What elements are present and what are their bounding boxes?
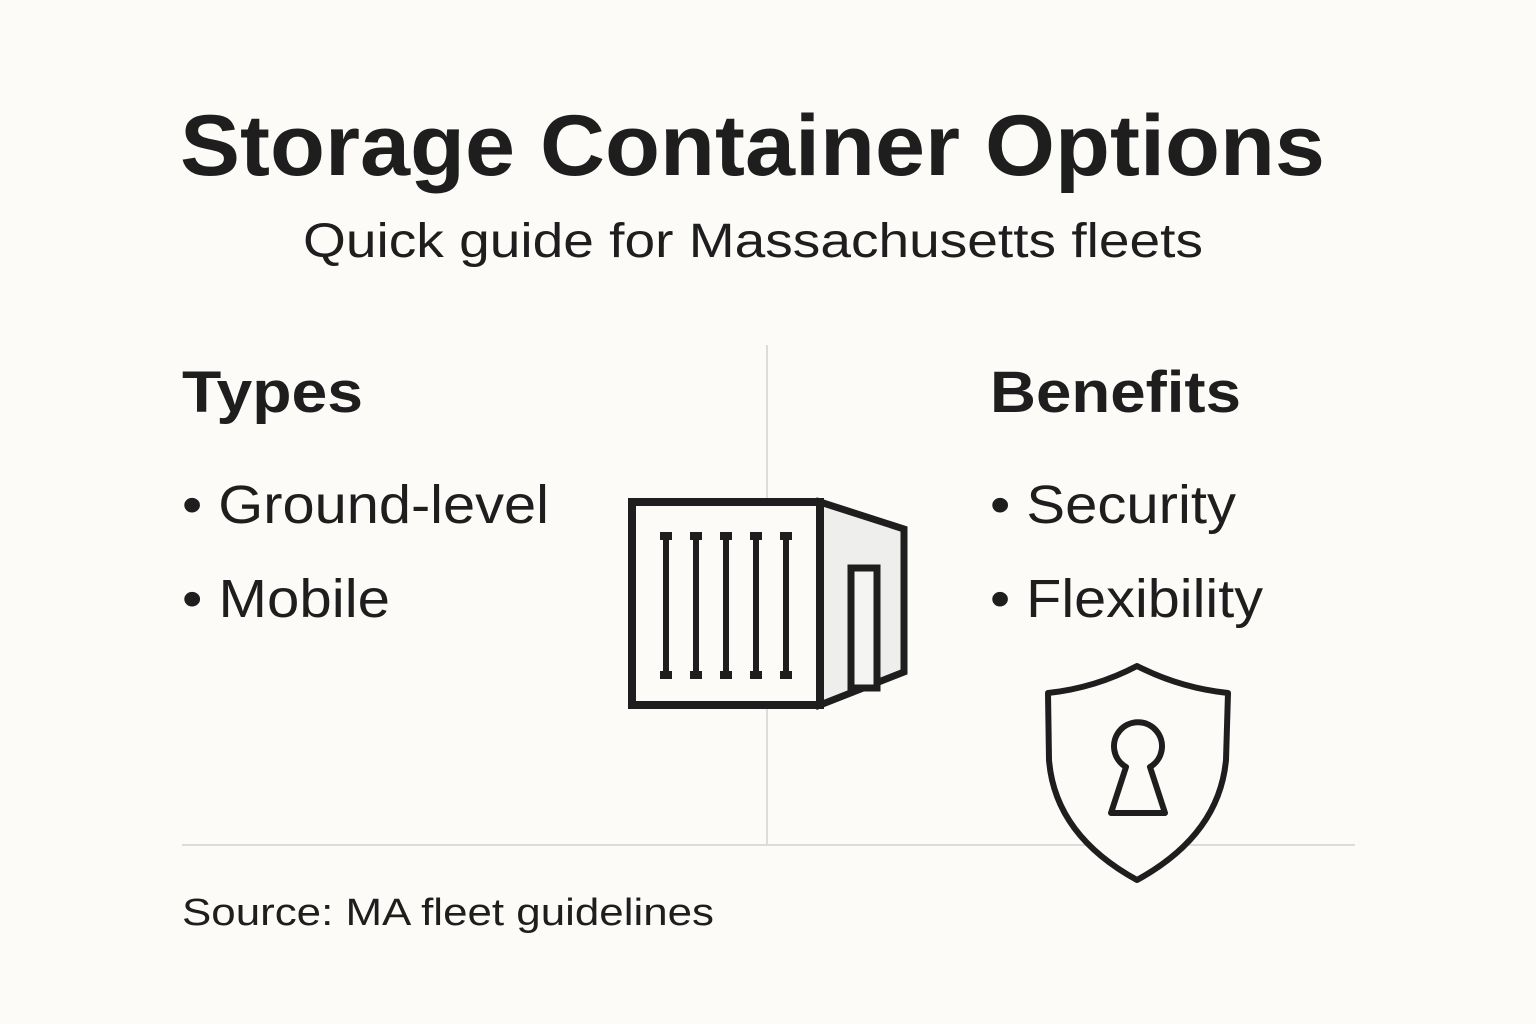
icon: container xyxy=(632,502,904,705)
icon: shield with keyhole xyxy=(1048,666,1228,880)
heading: benefits: Benefits xyxy=(990,360,1241,425)
list: types: • Ground-level xyxy=(182,475,549,535)
list: types xyxy=(182,475,549,629)
list: benefits: • Security xyxy=(990,475,1236,535)
heading: types: Types xyxy=(182,360,363,425)
list: benefits: • Flexibility xyxy=(990,569,1263,629)
panel: types xyxy=(182,360,549,629)
panel: benefits xyxy=(990,360,1263,629)
title: Storage Container Options xyxy=(180,98,1325,194)
list: types: • Mobile xyxy=(182,569,390,629)
source note: Source: MA fleet guidelines xyxy=(182,892,714,934)
list: benefits xyxy=(990,475,1263,629)
subtitle: Quick guide for Massachusetts fleets xyxy=(303,215,1203,268)
